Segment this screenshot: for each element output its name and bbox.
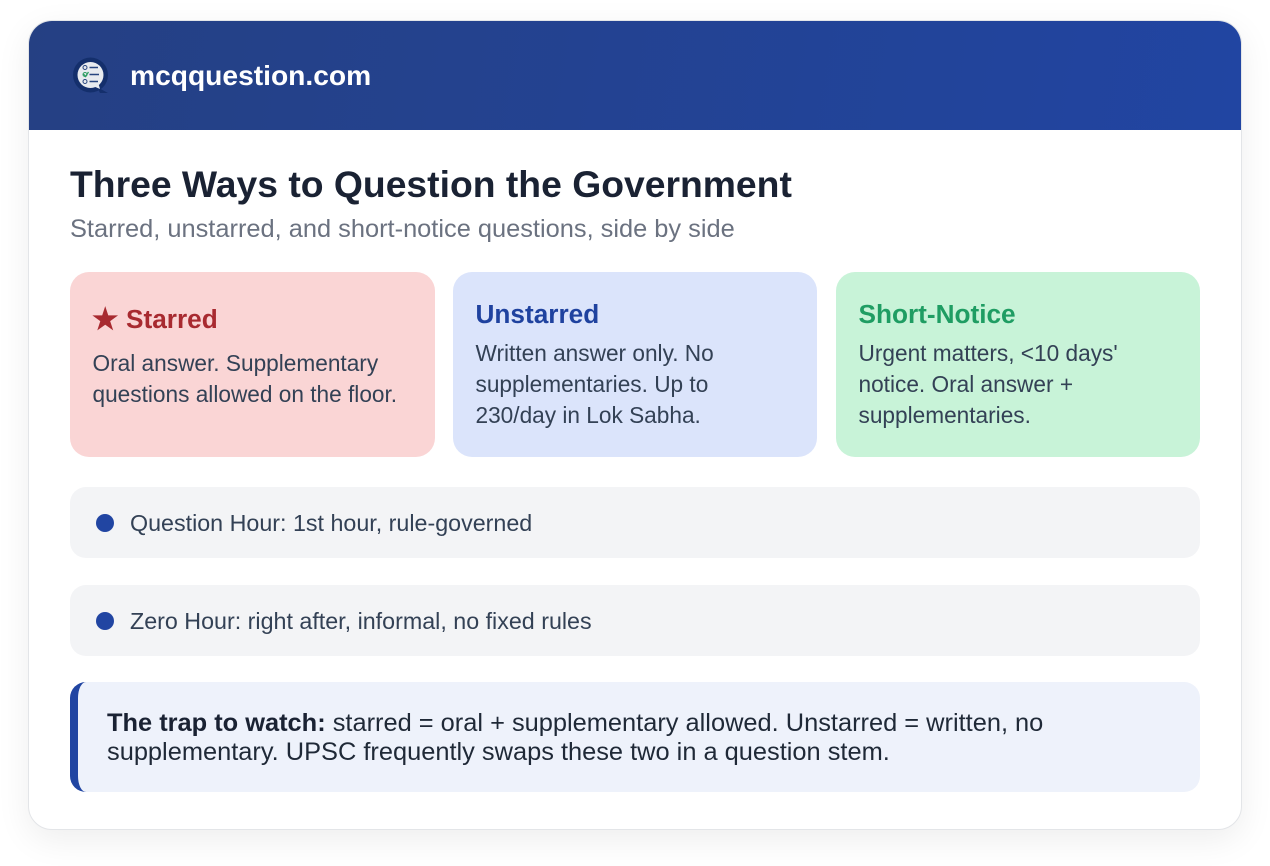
text: unstarred description: supplementaries. Up to (476, 371, 708, 397)
bullet row: question hour (70, 487, 1200, 558)
heading: starred (92, 303, 218, 336)
bullet row: zero hour (70, 585, 1200, 656)
subtitle: Starred, unstarred, and short-notice questions, side by side (70, 215, 735, 243)
text: unstarred description (476, 340, 714, 428)
text: short-notice description: supplementaries. (858, 402, 1031, 428)
bullet row: question hour: Question Hour: 1st hour, rule-governed (130, 510, 532, 536)
brand name: mcqquestion.com (130, 59, 371, 91)
bullet row: zero hour: Zero Hour: right after, informal, no fixed rules (130, 608, 592, 634)
panel: starred (70, 272, 435, 457)
panel: unstarred (453, 272, 817, 457)
text: short-notice description: notice. Oral answer + (858, 371, 1073, 397)
header band (29, 21, 1241, 130)
callout: the trap to watch (70, 682, 1200, 792)
icon: logo magnifier with checklist (73, 58, 108, 93)
text: unstarred description: 230/day in Lok Sabha. (476, 402, 701, 428)
callout: the trap to watch: supplementary. UPSC frequently swaps these two in a question stem. (107, 738, 890, 766)
heading: short-notice: Short-Notice (858, 298, 1016, 328)
text: starred description (92, 350, 397, 407)
callout: the trap to watch: The trap to watch: starred = oral + supplementary allowed. Unstarred = written, no (107, 709, 1043, 737)
panel: short-notice (836, 272, 1200, 457)
text: unstarred description: Written answer only. No (476, 340, 714, 366)
text: short-notice description (858, 340, 1118, 428)
heading: starred: Starred (126, 304, 218, 334)
heading: starred: ★ (92, 303, 118, 336)
text: starred description: Oral answer. Supplementary (92, 350, 378, 376)
title: Three Ways to Question the Government (70, 163, 792, 205)
heading: unstarred: Unstarred (476, 298, 599, 328)
text: starred description: questions allowed on the floor. (92, 381, 397, 407)
text: short-notice description: Urgent matters, <10 days' (858, 340, 1118, 366)
